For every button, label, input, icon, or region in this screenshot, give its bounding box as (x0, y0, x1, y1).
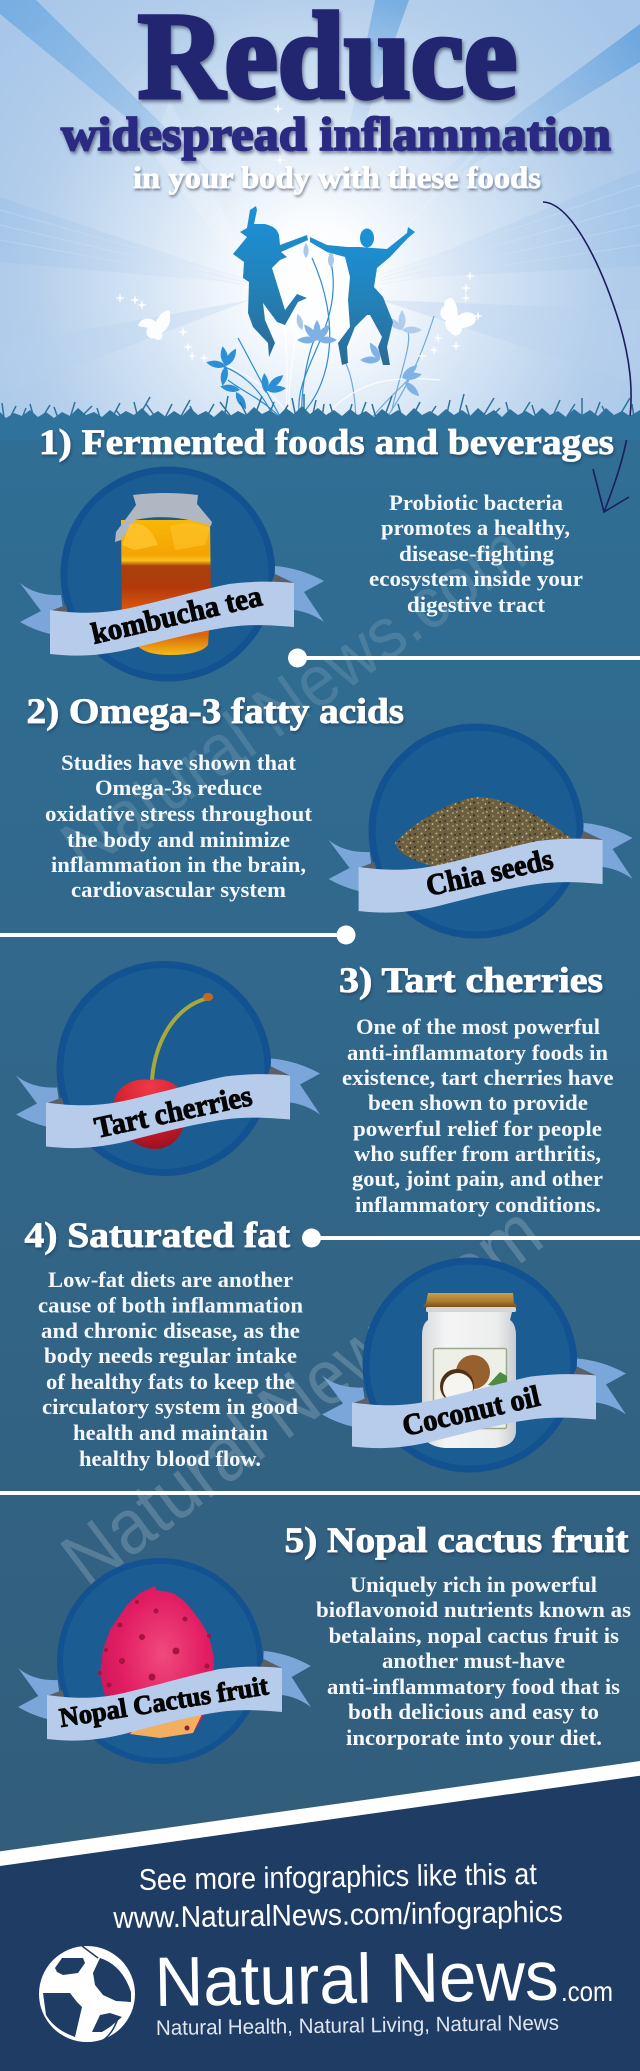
hero sky panel (0, 0, 640, 425)
logo .com: .com (561, 1976, 613, 2007)
text: omega-3: inflammation in the brain, (51, 852, 306, 877)
cherry (114, 993, 213, 1149)
text: probiotic: digestive tract (407, 592, 546, 617)
sun rays (0, 0, 640, 395)
ribbon 5 (18, 1651, 311, 1741)
text: cherries: gout, joint pain, and other (352, 1166, 603, 1191)
call to action: www.NaturalNews.com/infographics (112, 1896, 563, 1935)
label: nopal cactus fruit: Nopal Cactus fruit (57, 1670, 270, 1733)
text: probiotic: Probiotic bacteria (389, 490, 563, 515)
panel: 4 saturated fat (0, 1215, 640, 1495)
circle badge 2 (372, 727, 580, 935)
text: probiotic: promotes a healthy, (381, 515, 570, 540)
curved arrow (543, 202, 631, 512)
text: cherries: who suffer from arthritis, (354, 1141, 601, 1166)
ribbon 2 (329, 823, 633, 913)
label: tart cherries: Tart cherries (92, 1079, 255, 1145)
text: nopal: another must-have (382, 1648, 565, 1673)
text: cherries (342, 1014, 614, 1217)
text: cherries: inflammatory conditions. (355, 1192, 601, 1217)
panel: 3 tart cherries (16, 960, 614, 1217)
divider with dot 1 (288, 648, 640, 668)
logo wordmark: Natural News (154, 1937, 559, 2021)
divider with dot 3 (302, 1228, 640, 1248)
text: nopal: incorporate into your diet. (346, 1725, 602, 1750)
text: omega-3: the body and minimize (67, 827, 290, 852)
icon: left butterfly (138, 310, 170, 340)
text: saturated fat: healthy blood flow. (79, 1446, 261, 1471)
ribbon 4 (322, 1358, 626, 1448)
panel: footer (0, 1761, 640, 2071)
text: nopal: bioflavonoid nutrients known as (316, 1597, 631, 1622)
text: cherries: One of the most powerful (356, 1014, 600, 1039)
circle badge 1 (64, 470, 272, 678)
text: cherries: been shown to provide (368, 1090, 588, 1115)
divider with dot 2 (0, 926, 356, 944)
text: omega-3: cardiovascular system (71, 877, 286, 902)
white diagonal stripe (0, 1761, 640, 1866)
title: widespread inflammation: widespread inflammation (61, 108, 611, 161)
chia seeds pile (395, 797, 571, 866)
text: saturated fat: Low-fat diets are another (48, 1267, 293, 1292)
grass blades (2, 394, 634, 418)
subtitle: in your body with these foods (133, 160, 541, 195)
text: cherries: existence, tart cherries have (342, 1065, 614, 1090)
footer background (0, 1776, 640, 2071)
label: coconut oil: Coconut oil (399, 1380, 543, 1443)
logo tagline: Natural Health, Natural Living, Natural News (156, 2012, 559, 2040)
heading 1: 1) Fermented foods and beverages (39, 422, 614, 462)
text: saturated fat: health and maintain (73, 1420, 268, 1445)
text: saturated fat: body needs regular intake (44, 1343, 297, 1368)
plants illustration (206, 243, 440, 420)
circle badge 4 (366, 1261, 574, 1469)
ribbon 3 (16, 1058, 320, 1148)
circle badge 3 (60, 964, 268, 1172)
icon: right butterfly (440, 298, 476, 335)
text: omega-3 (45, 750, 313, 902)
text: saturated fat: circulatory system in good (42, 1394, 298, 1419)
watermark: lower: Natural News.com (45, 1187, 557, 1604)
text: probiotic: disease-fighting (399, 541, 554, 566)
silhouette: woman jumping (233, 206, 308, 357)
heading 5: 5) Nopal cactus fruit (284, 1520, 629, 1560)
circle badge 5 (60, 1561, 260, 1761)
text: probiotic (369, 490, 583, 617)
divider 4 (0, 1491, 640, 1495)
text: nopal: betalains, nopal cactus fruit is (329, 1623, 619, 1648)
text: saturated fat (38, 1267, 303, 1471)
call to action: See more infographics like this at (139, 1858, 538, 1897)
text: nopal (316, 1572, 631, 1750)
text: nopal: both delicious and easy to (348, 1699, 599, 1724)
text: nopal: anti-inflammatory food that is (327, 1674, 620, 1699)
text: cherries: powerful relief for people (353, 1116, 602, 1141)
heading 2: 2) Omega-3 fatty acids (26, 691, 404, 731)
panel: 5 nopal cactus fruit (18, 1520, 631, 1761)
label: chia seeds: Chia seeds (423, 843, 556, 903)
text: omega-3: oxidative stress throughout (45, 801, 313, 826)
text: saturated fat: cause of both inflammation (38, 1292, 303, 1318)
ribbon 1 (20, 566, 324, 656)
silhouette: man jumping (310, 227, 415, 365)
text: probiotic: ecosystem inside your (369, 566, 583, 591)
panel: 2 omega-3 (0, 691, 633, 944)
kombucha jar (115, 493, 212, 655)
grass (0, 394, 640, 440)
watermark: upper: Natural News.com (47, 509, 540, 887)
coconut oil jar (422, 1293, 517, 1448)
label: kombucha tea: kombucha tea (88, 580, 265, 651)
text: nopal: Uniquely rich in powerful (350, 1572, 597, 1597)
text: saturated fat: and chronic disease, as the (41, 1318, 300, 1343)
heading 3: 3) Tart cherries (339, 960, 603, 1000)
icon: globe logo (39, 1946, 135, 2042)
text: omega-3: Omega-3s reduce (95, 775, 262, 800)
heading 4: 4) Saturated fat (24, 1215, 290, 1255)
text: saturated fat: of healthy fats to keep the (46, 1369, 295, 1394)
decorative stars (115, 104, 483, 363)
text: omega-3: Studies have shown that (61, 750, 297, 775)
cactus fruit (98, 1586, 214, 1738)
panel: 1 fermented foods (20, 422, 640, 678)
call to action (112, 1858, 563, 1935)
text: cherries: anti-inflammatory foods in (347, 1040, 608, 1065)
